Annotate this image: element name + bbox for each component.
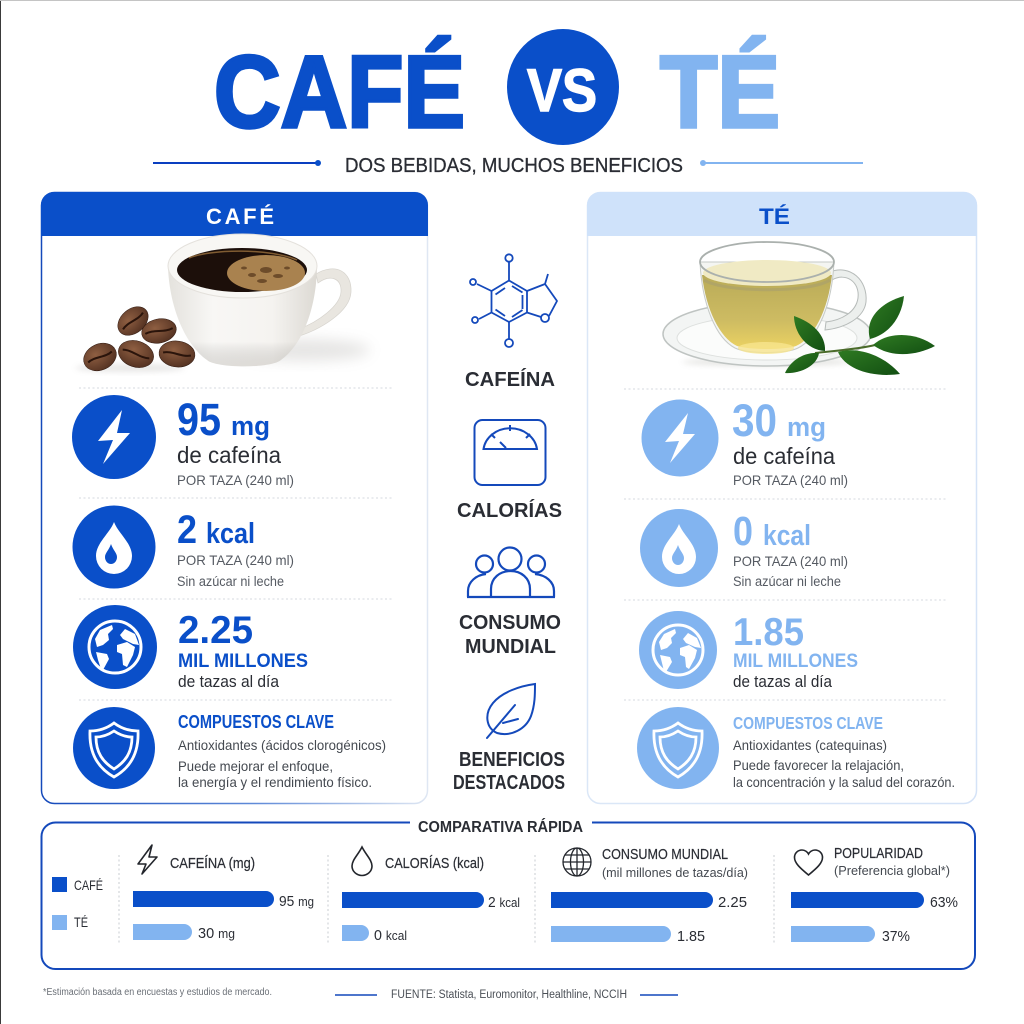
stat: té caffeine: de cafeína (733, 443, 835, 469)
chart: popularity: 37% (882, 928, 910, 945)
center column: categories: DESTACADOS (453, 772, 565, 794)
chart: calories (342, 847, 520, 944)
panel: té (587, 192, 977, 804)
photo: tea cup and leaves (663, 242, 935, 375)
café header: CAFÉ (206, 204, 274, 229)
center column: categories: CALORÍAS (457, 499, 562, 522)
chart: consumption (551, 847, 748, 945)
icon: weighing scale (474, 420, 546, 485)
icon: molecule (470, 254, 557, 347)
center column: categories: BENEFICIOS (459, 749, 565, 771)
title: CAFÉ (214, 35, 465, 149)
stat: café compounds: la energía y el rendimiento físico. (178, 774, 372, 790)
subtitle: DOS BEBIDAS, MUCHOS BENEFICIOS (345, 155, 683, 177)
chart: caffeine (133, 845, 314, 942)
stat: café caffeine: de cafeína (177, 442, 281, 468)
stat: café consumption: de tazas al día (178, 672, 279, 691)
stat: té compounds: Puede favorecer la relajación, (733, 757, 904, 773)
icon: bolt (72, 395, 156, 479)
vs badge (507, 29, 619, 145)
icon: people (467, 548, 555, 597)
panel: café (41, 192, 428, 804)
stat: café caffeine (72, 394, 294, 488)
title (214, 29, 780, 149)
stat: café consumption: 2.25 (178, 609, 253, 652)
stat: café compounds: COMPUESTOS CLAVE (178, 712, 334, 732)
stat: café consumption: MIL MILLONES (178, 650, 308, 672)
stat: té calories: Sin azúcar ni leche (733, 574, 841, 589)
photo: coffee cup and beans (75, 234, 370, 376)
stat: té caffeine: POR TAZA (240 ml) (733, 472, 848, 488)
center column: categories: MUNDIAL (465, 636, 556, 658)
té header (587, 192, 977, 236)
stat: té caffeine: mg (787, 412, 826, 442)
icon: shield (73, 707, 155, 789)
chart: calories: 0 kcal (374, 927, 407, 944)
panel: comparativa rápida (42, 818, 975, 969)
icon: bolt (642, 400, 718, 476)
stat: té consumption: de tazas al día (733, 672, 832, 691)
icon: leaf (487, 684, 535, 738)
chart: popularity: 63% (930, 894, 958, 911)
café header (41, 192, 428, 236)
chart: popularity: POPULARIDAD (834, 846, 923, 862)
subtitle (153, 155, 863, 177)
chart: caffeine: CAFEÍNA (mg) (170, 855, 255, 872)
icon: bolt outline (138, 845, 157, 874)
stat: café calories: kcal (206, 518, 255, 550)
chart: popularity (791, 846, 958, 945)
stat: té compounds (637, 707, 955, 790)
stat: café calories: POR TAZA (240 ml) (177, 552, 294, 568)
stat: café compounds: Puede mejorar el enfoque, (178, 758, 333, 774)
stat: café calories (72, 506, 294, 589)
stat: café caffeine: POR TAZA (240 ml) (177, 472, 294, 488)
stat: té caffeine: 30 (732, 395, 777, 446)
footnote: *Estimación basada en encuestas y estudios de mercado. (43, 987, 272, 998)
stat: té compounds: Antioxidantes (catequinas) (733, 737, 887, 753)
coffee beans (79, 301, 196, 376)
legend: TÉ (74, 914, 88, 930)
chart: consumption: 2.25 (718, 894, 747, 911)
stat: café compounds (73, 707, 386, 790)
center column: categories: CONSUMO (459, 612, 561, 634)
stat: té consumption (639, 611, 858, 691)
icon: globe (639, 611, 717, 689)
té header: TÉ (759, 204, 790, 229)
vs badge: VS (527, 57, 597, 124)
stat: té calories: 0 (733, 508, 753, 554)
center column: categories: CAFEÍNA (465, 368, 555, 391)
stat: café calories: Sin azúcar ni leche (177, 574, 284, 589)
stat: café compounds: Antioxidantes (ácidos clorogénicos) (178, 737, 386, 753)
source line: FUENTE: Statista, Euromonitor, Healthline, NCCIH (391, 989, 627, 1001)
center column: categories (453, 254, 565, 794)
chart: calories: 2 kcal (488, 894, 520, 911)
chart: calories: CALORÍAS (kcal) (385, 855, 484, 872)
stat: café caffeine: 95 (177, 394, 221, 445)
icon: globe (73, 605, 157, 689)
stat: té compounds: COMPUESTOS CLAVE (733, 713, 883, 733)
stat: té calories: kcal (763, 520, 811, 552)
comparison heading: COMPARATIVA RÁPIDA (418, 819, 583, 836)
icon: heart outline (794, 850, 822, 875)
icon: drop outline (352, 847, 372, 876)
chart: caffeine: 95 mg (279, 893, 314, 910)
stat: té consumption: MIL MILLONES (733, 651, 858, 672)
chart: consumption: CONSUMO MUNDIAL (602, 847, 728, 863)
stat: café caffeine: mg (231, 411, 270, 441)
stat: té caffeine (642, 395, 848, 488)
legend: CAFÉ (74, 877, 103, 893)
stat: café consumption (73, 605, 308, 691)
icon: drop (72, 506, 156, 588)
icon: globe outline (563, 848, 591, 876)
chart: consumption: (mil millones de tazas/día) (602, 865, 748, 880)
stat: té consumption: 1.85 (733, 611, 804, 654)
icon: shield (637, 707, 719, 789)
stat: café calories: 2 (177, 508, 197, 552)
stat: té calories: POR TAZA (240 ml) (733, 553, 848, 569)
chart: caffeine: 30 mg (198, 925, 235, 942)
chart: popularity: (Preferencia global*) (834, 863, 950, 878)
chart: consumption: 1.85 (677, 928, 705, 945)
tea leaves (785, 296, 935, 375)
stat: té calories (640, 508, 848, 589)
stat: té compounds: la concentración y la salud del corazón. (733, 774, 955, 790)
title: TÉ (660, 35, 780, 149)
legend (52, 877, 103, 930)
icon: drop (640, 509, 718, 587)
